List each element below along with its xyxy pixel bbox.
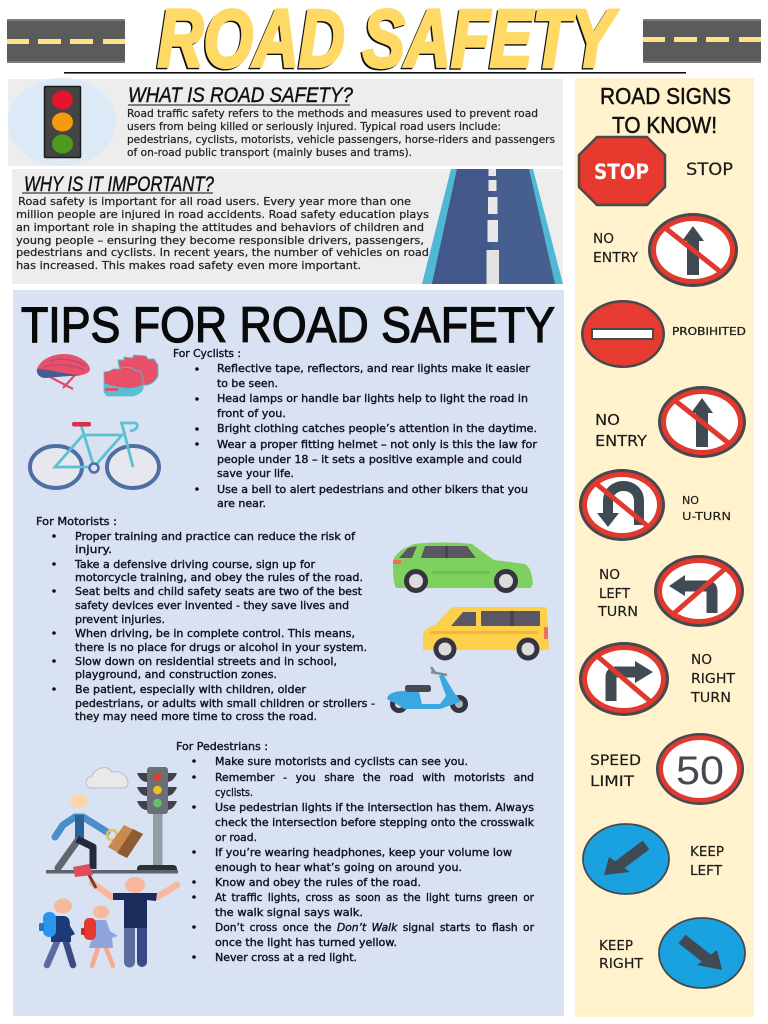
text: for pedestrians: Remember - you share the road with motorists and [215, 772, 534, 784]
panel: why is it important [12, 169, 563, 284]
icon: traffic light [8, 78, 116, 166]
label: keep left: KEEP [690, 845, 724, 860]
heading: tips for road safety: TIPS FOR ROAD SAFETY [21, 297, 555, 353]
label: no entry 1: ENTRY [593, 251, 638, 266]
label: no right turn: NO [691, 653, 712, 668]
sign: stop [579, 137, 665, 205]
text: for cyclists: are near. [217, 498, 266, 510]
sign: speed limit 50 [656, 733, 744, 805]
text: for cyclists: to be seen. [217, 378, 278, 390]
text: for pedestrians: the walk signal says walk. [215, 907, 363, 919]
label: speed limit: SPEED [590, 753, 641, 769]
label: speed limit: LIMIT [590, 774, 634, 790]
icon: cloud [86, 768, 128, 788]
panel: what is road safety [8, 78, 563, 166]
text: for pedestrians: check the intersection before stepping onto the crosswalk [215, 817, 534, 829]
text: for motorists: Seat belts and child safety seats are two of the best [75, 586, 362, 598]
icon: man with flag [73, 864, 177, 968]
text: for pedestrians: or road. [215, 832, 257, 844]
text: why road safety matters: has increased. This makes road safety even more important. [16, 260, 361, 272]
panel: road signs [575, 78, 754, 1017]
text: for pedestrians: Never cross at a red light. [215, 952, 357, 964]
text: for motorists: injury. [75, 544, 112, 556]
text: for motorists: there is no place for drugs or alcohol in your system. [75, 642, 367, 654]
sign: stop: STOP [594, 160, 649, 184]
label: keep left [690, 845, 724, 879]
text: for cyclists: For Cyclists : [173, 348, 241, 360]
label: speed limit [590, 753, 641, 790]
sign: speed limit 50: 50 [676, 749, 724, 793]
label: no u-turn: NO [682, 494, 699, 507]
text: road safety definition: Road traffic safety refers to the methods and measures used to prevent road [127, 108, 538, 120]
text: for motorists: For Motorists : [36, 516, 117, 528]
text: for motorists: When driving, be in complete control. This means, [75, 628, 355, 640]
text: for pedestrians: Don’t cross once the Don’t Walk signal starts to flash or [215, 922, 535, 934]
label: keep right: KEEP [599, 939, 633, 954]
label: keep right: RIGHT [599, 957, 643, 972]
label: prohibited: PROBIHITED [672, 326, 746, 338]
icon: scooter [387, 667, 468, 713]
text: for cyclists: save your life. [217, 468, 294, 480]
text: for motorists: Be patient, especially with children, older [75, 684, 307, 696]
text: for motorists: they may need more time to cross the road. [75, 711, 317, 723]
heading: what is road safety: WHAT IS ROAD SAFETY? [128, 84, 353, 107]
heading: road signs to know: TO KNOW! [612, 112, 717, 138]
text: for motorists: playground, and construction zones. [75, 669, 277, 681]
label: no entry 1: NO [593, 232, 614, 247]
label: no entry 2: ENTRY [595, 432, 648, 450]
icon: road left [7, 19, 125, 63]
label: no entry 1 [593, 232, 638, 266]
label: no left turn: NO [599, 568, 620, 583]
label: no entry 2: NO [595, 411, 620, 429]
label: no u-turn: U-TURN [682, 510, 731, 523]
text: for motorists: Take a defensive driving course, sign up for [74, 559, 316, 571]
label: no entry 2 [595, 411, 648, 450]
text: for pedestrians: Use pedestrian lights if the intersection has them. Always [215, 802, 534, 814]
label: no right turn [690, 653, 735, 706]
sign: no entry 2 [658, 386, 746, 458]
icon: gloves [104, 355, 158, 396]
text: for pedestrians: For Pedestrians : [176, 741, 268, 753]
sign: no u-turn [579, 469, 665, 541]
heading: why is it important: WHY IS IT IMPORTANT? [24, 173, 214, 196]
text: for pedestrians: enough to hear what’s going on around you. [215, 862, 462, 874]
icon: pedestrians and traffic light [39, 767, 178, 968]
text: road safety definition: pedestrians, cyclists, motorists, vehicle passengers, horse-riders and passengers [127, 134, 555, 146]
text: why road safety matters: pedestrians and cyclists. In recent years, the number of vehicles on road [16, 247, 429, 259]
text: for cyclists: people under 18 – it sets a positive example and could [217, 454, 522, 466]
label: keep left: LEFT [690, 864, 722, 879]
text: why road safety matters [16, 196, 429, 272]
text: for pedestrians: cyclists. [215, 787, 253, 799]
text: for motorists [36, 516, 375, 723]
text: for motorists: safety devices ever invented - they save lives and [75, 600, 349, 612]
text: for cyclists: Wear a proper fitting helmet – not only is this the law for [217, 439, 538, 451]
icon: road right [643, 19, 761, 63]
text: for motorists: Slow down on residential streets and in school, [75, 656, 337, 668]
text: for pedestrians: If you’re wearing headphones, keep your volume low [215, 847, 513, 859]
label: no right turn: TURN [690, 691, 731, 706]
text: for motorists: motorcycle training, and obey the rules of the road. [75, 572, 363, 584]
text: why road safety matters: an important role in shaping the attitudes and behaviors of children and [16, 222, 424, 234]
text: for motorists: prevent injuries. [75, 614, 165, 626]
text: why road safety matters: Road safety is important for all road users. Every year more than one [18, 196, 411, 208]
text: for motorists: pedestrians, or adults with small children or strollers - [75, 698, 375, 710]
sign: prohibited [581, 300, 665, 368]
text: road safety definition: of on-road public transport (mainly buses and trams). [127, 147, 412, 159]
label: no left turn: TURN [597, 605, 638, 620]
text: for cyclists [173, 348, 538, 510]
label: no left turn: LEFT [599, 587, 630, 602]
icon: bicycle [30, 422, 159, 488]
label: no right turn: RIGHT [691, 672, 735, 687]
text: for pedestrians: At traffic lights, cross as soon as the light turns green or [215, 892, 535, 904]
heading: road signs to know [600, 83, 731, 138]
label: stop: STOP [686, 160, 733, 179]
text: for cyclists: Reflective tape, reflectors, and rear lights make it easier [217, 363, 531, 375]
heading: road signs to know: ROAD SIGNS [600, 83, 731, 109]
sign: keep right [659, 918, 745, 988]
icon: street traffic light [46, 767, 178, 874]
sign: keep left [583, 824, 669, 894]
text: for cyclists: front of you. [217, 408, 286, 420]
label: no u-turn [682, 494, 731, 523]
sign: no entry 1 [648, 213, 738, 287]
label: no left turn [597, 568, 638, 620]
text: for motorists: Proper training and practice can reduce the risk of [75, 531, 355, 543]
icon: green car [393, 542, 533, 593]
icon: road perspective [422, 169, 563, 284]
icon: walking man with briefcase [55, 794, 143, 869]
icon: child with blue backpack [39, 898, 75, 965]
text: for cyclists: Head lamps or handle bar lights help to light the road in [217, 393, 528, 405]
panel: tips for road safety [13, 290, 564, 1016]
text: for pedestrians: once the light has turned yellow. [215, 937, 397, 949]
label: keep right [599, 939, 643, 972]
icon: helmet [37, 354, 90, 389]
text: why road safety matters: million people are injured in road accidents. Road safety education plays [16, 209, 429, 221]
text: for cyclists: Bright clothing catches people’s attention in the daytime. [217, 423, 537, 435]
sign: no left turn [654, 555, 744, 627]
text: road safety definition [127, 108, 555, 159]
text: for pedestrians: Make sure motorists and cyclists can see you. [215, 756, 468, 768]
sign: no right turn [579, 642, 669, 716]
text: for pedestrians: Know and obey the rules of the road. [215, 877, 421, 889]
icon: yellow van [423, 607, 549, 660]
text: why road safety matters: young people – ensuring they become responsible drivers, passengers, [16, 235, 424, 247]
text: for cyclists: Use a bell to alert pedestrians and other bikers that you [217, 484, 528, 496]
text: road safety definition: users from being killed or seriously injured. Typical road users include: [127, 121, 501, 133]
text: for pedestrians [176, 741, 535, 964]
icon: child with red backpack [81, 906, 118, 966]
